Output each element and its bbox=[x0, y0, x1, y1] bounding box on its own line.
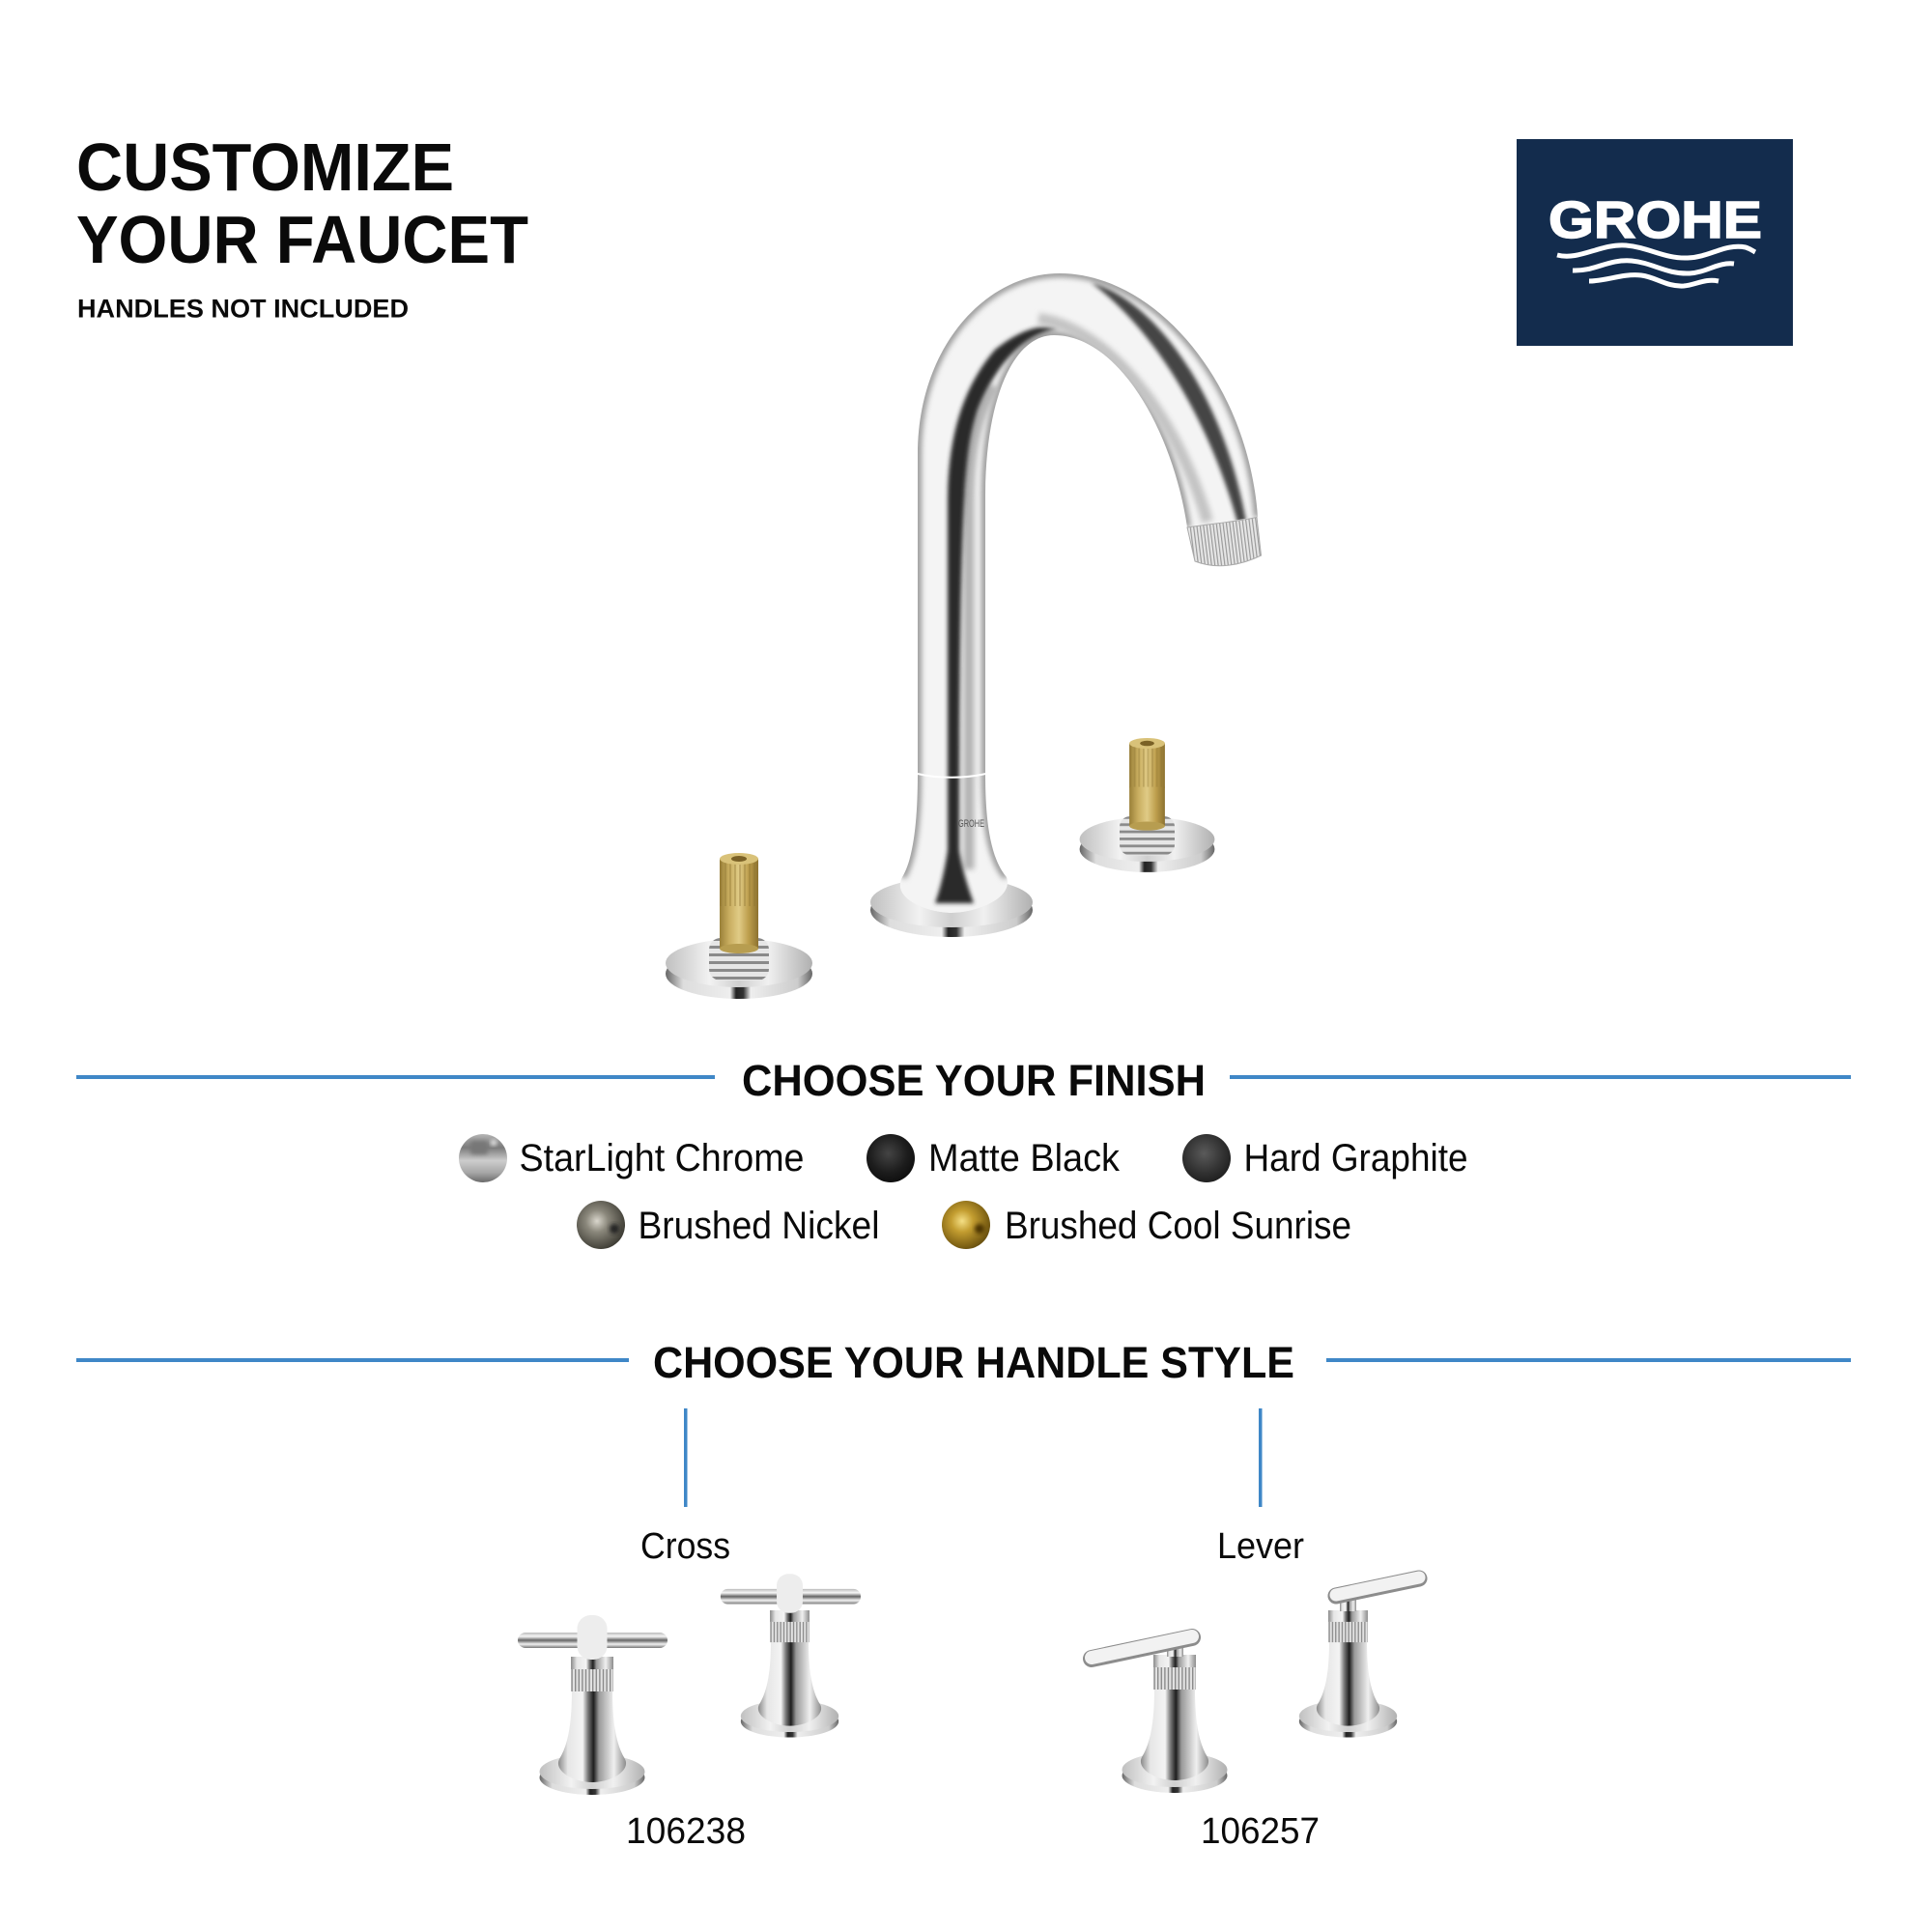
label: cross: Cross bbox=[640, 1526, 730, 1567]
model number: cross: 106238 bbox=[626, 1811, 746, 1852]
valve right bbox=[1080, 738, 1214, 872]
swatch: Hard Graphite bbox=[1182, 1134, 1468, 1182]
title line two: YOUR FAUCET bbox=[76, 202, 528, 277]
swatch: Matte Black: Matte Black bbox=[928, 1137, 1121, 1179]
swatch: StarLight Chrome bbox=[459, 1134, 804, 1182]
connector: cross bbox=[684, 1408, 688, 1507]
product image: faucet with valves bbox=[666, 273, 1262, 999]
cross handle back bbox=[721, 1574, 861, 1738]
section: choose your finish bbox=[76, 1056, 1851, 1249]
divider left bbox=[76, 1358, 629, 1362]
divider right bbox=[1326, 1358, 1851, 1362]
aerator bbox=[1187, 518, 1262, 566]
faucet base disc bbox=[870, 877, 1033, 937]
logo: GROHE bbox=[1517, 139, 1793, 346]
swatch: Brushed Nickel bbox=[577, 1201, 879, 1249]
stem joint bbox=[918, 774, 985, 778]
swatch: Hard Graphite: Hard Graphite bbox=[1244, 1137, 1468, 1179]
divider left bbox=[76, 1075, 715, 1079]
subtitle: HANDLES NOT INCLUDED bbox=[77, 294, 409, 323]
title line one: CUSTOMIZE bbox=[76, 129, 454, 205]
grey reflection along spout bbox=[1038, 319, 1208, 522]
swatch: Brushed Cool Sunrise: Brushed Cool Sunrise bbox=[1005, 1205, 1351, 1247]
swatch: Brushed Nickel: Brushed Nickel bbox=[638, 1205, 879, 1247]
faucet spout body bbox=[900, 273, 1258, 913]
swatch: StarLight Chrome: StarLight Chrome bbox=[520, 1137, 804, 1179]
logo: GROHE: GROHE bbox=[1548, 191, 1762, 249]
lever handle back bbox=[1299, 1577, 1419, 1738]
lever handle front bbox=[1092, 1636, 1227, 1793]
cross handle set bbox=[518, 1574, 861, 1795]
grey body tone right of streak bbox=[969, 386, 995, 869]
lever handle set bbox=[1092, 1577, 1419, 1793]
cross handle front bbox=[518, 1615, 668, 1795]
dark reflection inner arch and stem bbox=[935, 327, 1059, 903]
edge shading bbox=[902, 273, 1258, 877]
dark reflection outer arch bbox=[1092, 283, 1246, 523]
heading: CHOOSE YOUR HANDLE STYLE bbox=[653, 1338, 1294, 1387]
section: choose your handle style bbox=[76, 1338, 1851, 1852]
title block bbox=[76, 129, 528, 323]
swatch: Matte Black bbox=[867, 1134, 1121, 1182]
stem logo: GROHE bbox=[958, 818, 984, 830]
heading: CHOOSE YOUR FINISH bbox=[742, 1056, 1206, 1105]
label: lever: Lever bbox=[1217, 1526, 1304, 1567]
valve left bbox=[666, 853, 812, 999]
divider right bbox=[1230, 1075, 1851, 1079]
connector: lever bbox=[1259, 1408, 1262, 1507]
model number: lever: 106257 bbox=[1201, 1811, 1320, 1852]
